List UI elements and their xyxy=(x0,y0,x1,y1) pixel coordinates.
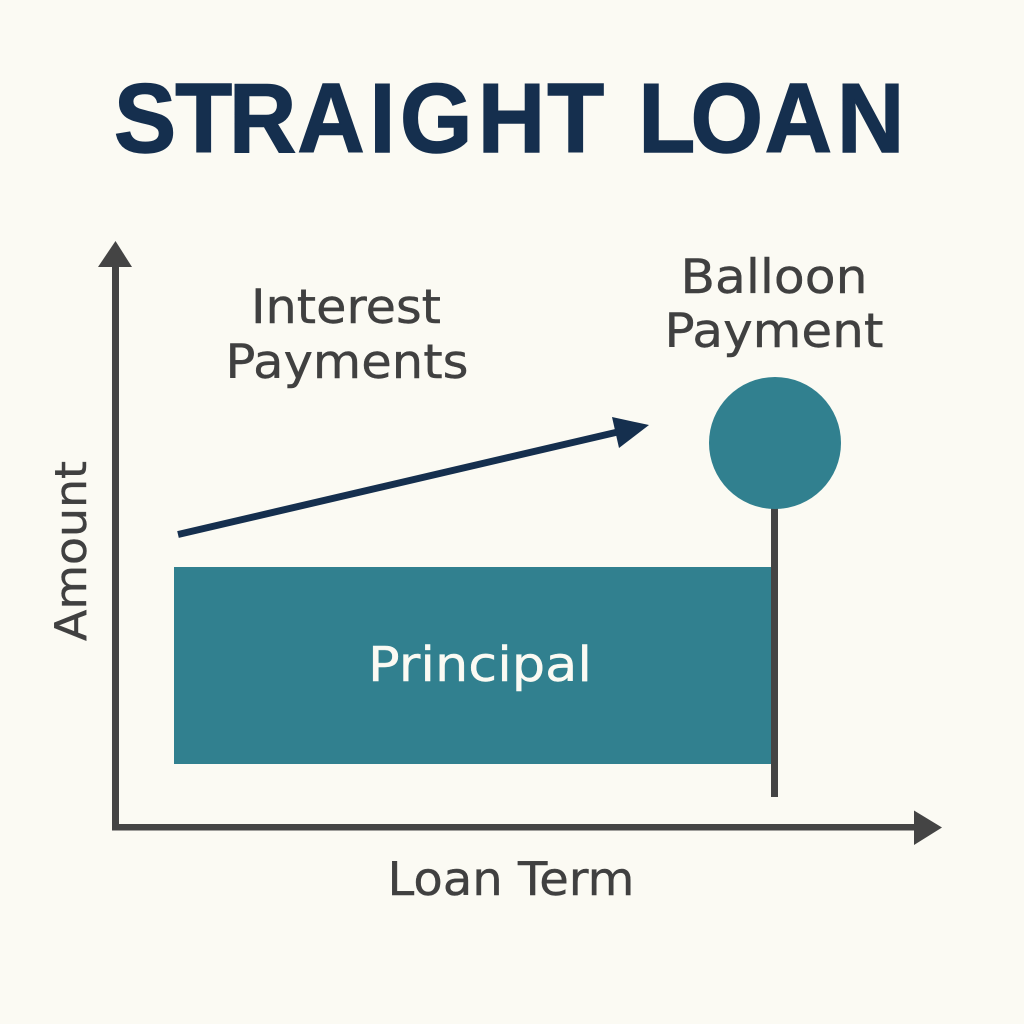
x axis label: Loan Term xyxy=(388,852,634,906)
interest payments label xyxy=(226,280,468,390)
interest arrow xyxy=(178,417,649,534)
balloon payment label: Balloon xyxy=(680,250,868,305)
interest payments label: Payments xyxy=(226,335,468,390)
principal block: Principal xyxy=(368,637,592,693)
principal block xyxy=(174,567,774,764)
balloon payment label xyxy=(664,250,884,359)
y axis label: Amount xyxy=(46,461,97,641)
balloon payment stem xyxy=(771,505,778,797)
y axis arrow xyxy=(98,241,132,830)
balloon payment label: Payment xyxy=(664,304,884,359)
title: STRAIGHT LOAN xyxy=(114,64,904,174)
interest payments label: Interest xyxy=(251,280,441,335)
x axis arrow xyxy=(112,810,942,845)
balloon payment circle xyxy=(709,377,841,509)
